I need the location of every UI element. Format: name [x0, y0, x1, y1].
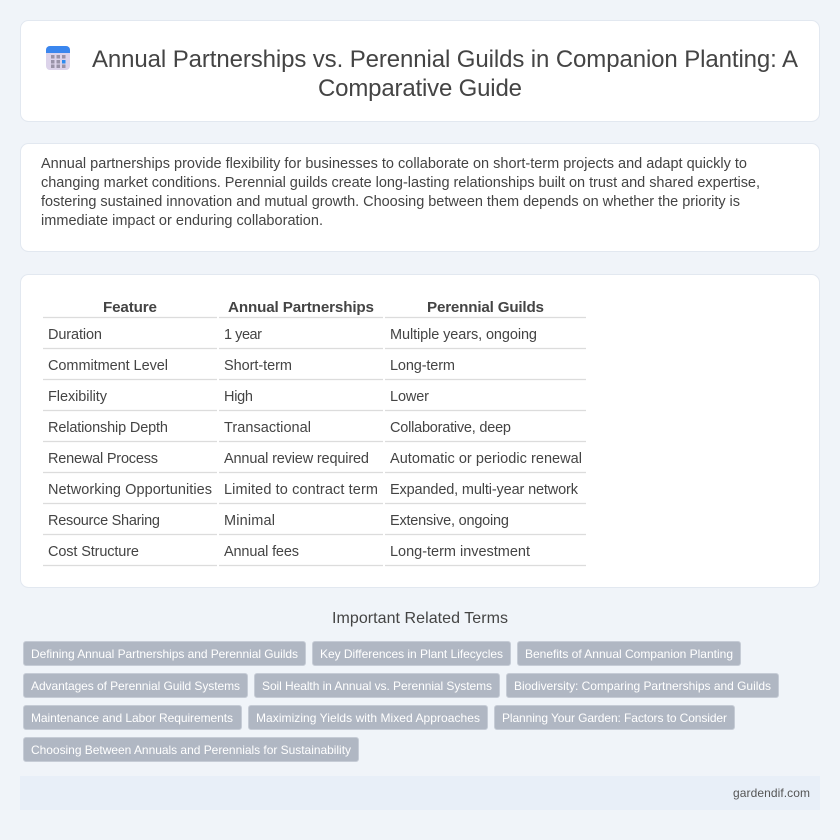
row: Relationship Depth: Relationship Depth: [48, 420, 168, 436]
row: Relationship Depth: [48, 420, 511, 436]
row: Resource Sharing: [48, 513, 509, 529]
intro paragraph: Annual partnerships provide flexibility for businesses to collaborate on short-term projects and adapt quickly to: [41, 156, 747, 172]
row: Duration: 1 year: [224, 327, 262, 343]
row: Relationship Depth: Transactional: [224, 420, 311, 436]
row: Cost Structure: Long-term investment: [390, 544, 530, 560]
tag: [24, 738, 358, 762]
tag: [506, 674, 778, 698]
row: Duration: Multiple years, ongoing: [390, 327, 537, 343]
row: Resource Sharing: Minimal: [224, 513, 275, 529]
row: Networking Opportunities: Limited to contract term: [224, 482, 378, 498]
tag: Key Differences in Plant Lifecycles: [320, 647, 503, 661]
row: Cost Structure: Cost Structure: [48, 544, 139, 560]
tag: [254, 674, 500, 698]
heading: important related terms: Important Related Terms: [332, 610, 508, 627]
footer bar: [20, 776, 820, 810]
table header: Perennial Guilds: [427, 299, 544, 316]
row: Renewal Process: Annual review required: [224, 451, 369, 467]
row: Networking Opportunities: [48, 482, 579, 498]
row: Renewal Process: Automatic or periodic renewal: [390, 451, 582, 467]
tag: [518, 642, 740, 666]
row: Duration: Duration: [48, 327, 102, 343]
intro paragraph: immediate impact or enduring collaboration.: [41, 213, 323, 229]
panel: comparison table: [20, 274, 820, 588]
row: Cost Structure: Annual fees: [224, 544, 299, 560]
tag: Benefits of Annual Companion Planting: [525, 647, 733, 661]
title: Annual Partnerships vs. Perennial Guilds in Companion Planting: A: [92, 46, 798, 73]
row: Commitment Level: [48, 358, 455, 374]
title: [92, 46, 798, 102]
title: Comparative Guide: [318, 75, 522, 102]
row: Renewal Process: [48, 451, 582, 467]
tag: Biodiversity: Comparing Partnerships and Guilds: [514, 679, 771, 693]
footer site name: gardendif.com: [733, 786, 810, 800]
tag: [24, 642, 306, 666]
tag: [24, 674, 248, 698]
tag: [494, 706, 734, 730]
panel: intro text: [20, 144, 820, 252]
intro paragraph: [41, 156, 760, 229]
row: Networking Opportunities: Expanded, multi-year network: [390, 482, 579, 498]
row: Cost Structure: [48, 544, 530, 560]
row: Flexibility: High: [224, 389, 253, 405]
tag: Maximizing Yields with Mixed Approaches: [256, 711, 480, 725]
tag: Advantages of Perennial Guild Systems: [31, 679, 240, 693]
row: Commitment Level: Long-term: [390, 358, 455, 374]
row: Renewal Process: Renewal Process: [48, 451, 158, 467]
row: Duration: [48, 327, 537, 343]
row: Relationship Depth: Collaborative, deep: [390, 420, 511, 436]
row: Flexibility: [48, 389, 429, 405]
tag: [248, 706, 488, 730]
tag: Soil Health in Annual vs. Perennial Systems: [262, 679, 492, 693]
row: Commitment Level: Commitment Level: [48, 358, 168, 374]
row: Commitment Level: Short-term: [224, 358, 292, 374]
table grid lines: [43, 318, 586, 566]
tag: [312, 642, 510, 666]
panel: title header: [20, 20, 820, 122]
row: Networking Opportunities: Networking Opportunities: [48, 482, 212, 498]
intro paragraph: fostering sustained innovation and mutual growth. Choosing between them depends on whether the priority is: [41, 194, 740, 210]
tag: Planning Your Garden: Factors to Consider: [502, 711, 727, 725]
related term tags: [24, 642, 778, 762]
intro paragraph: changing market conditions. Perennial guilds create long-lasting relationships built on trust and shared expertise,: [41, 175, 760, 191]
table header: [103, 299, 544, 316]
tag: Maintenance and Labor Requirements: [31, 711, 233, 725]
row: Resource Sharing: Extensive, ongoing: [390, 513, 509, 529]
row: Flexibility: Lower: [390, 389, 429, 405]
table header: Annual Partnerships: [228, 299, 374, 316]
row: Resource Sharing: Resource Sharing: [48, 513, 160, 529]
row: Flexibility: Flexibility: [48, 389, 108, 405]
tag: Choosing Between Annuals and Perennials for Sustainability: [31, 743, 351, 757]
icon: calendar: [46, 46, 70, 70]
tag: [24, 706, 242, 730]
table header: Feature: [103, 299, 157, 316]
tag: Defining Annual Partnerships and Perennial Guilds: [31, 647, 298, 661]
